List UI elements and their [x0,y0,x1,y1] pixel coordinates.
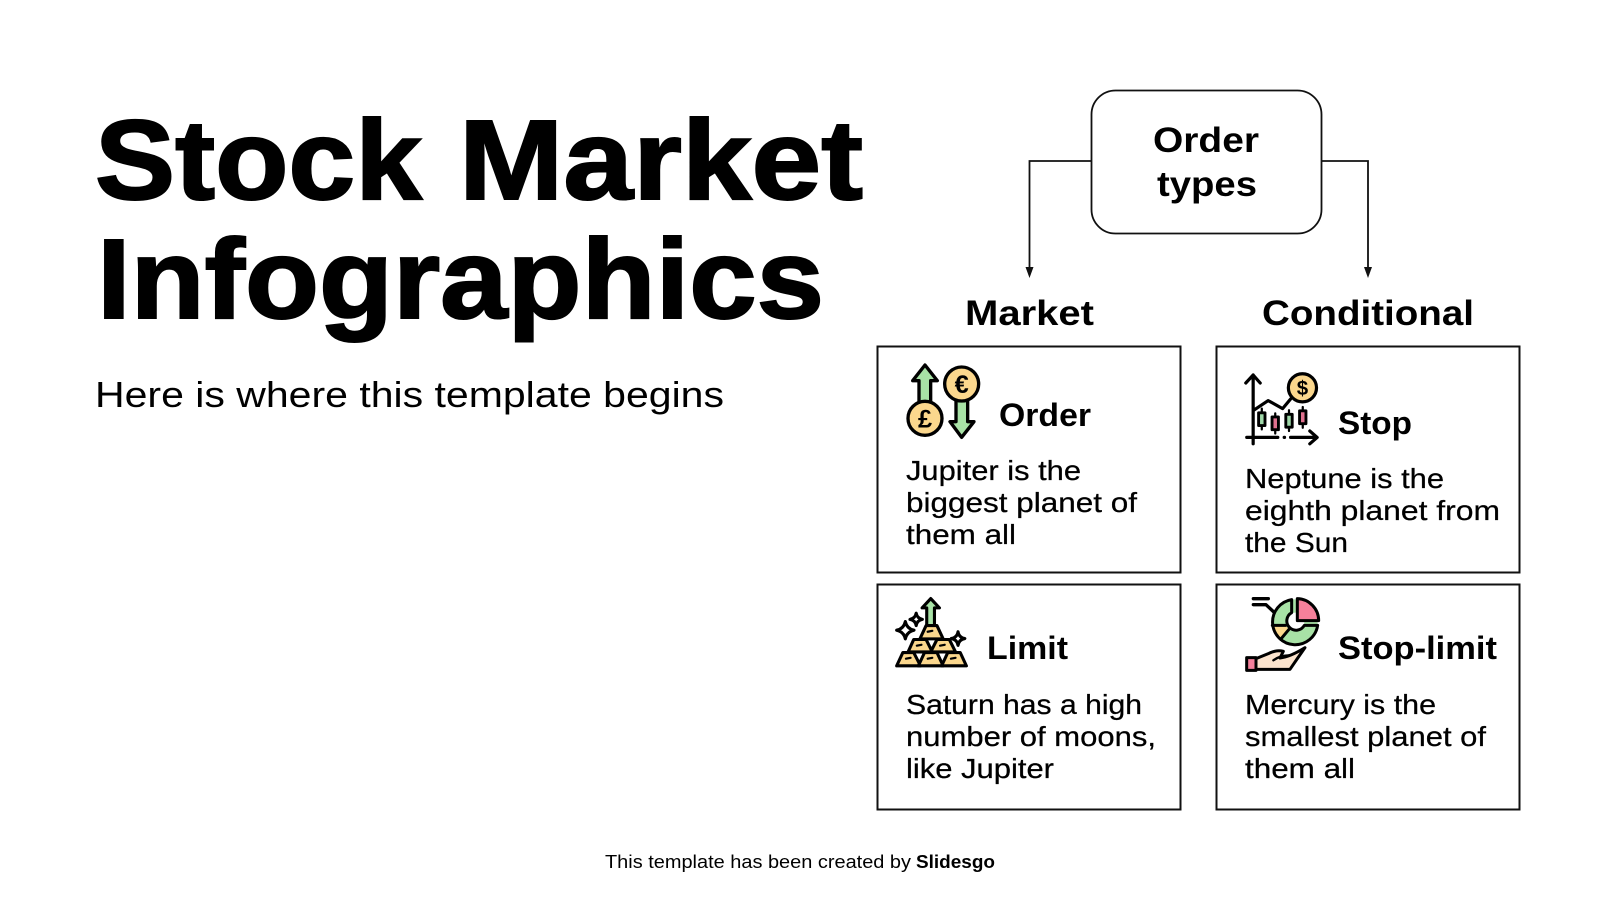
card text: number of moons, [906,721,1156,752]
icon: candlestick chart with coin [1246,374,1317,444]
root box: order types: Order [1153,121,1259,160]
title: Market [459,97,863,223]
card text: Jupiter is the [906,455,1081,486]
subtitle: Here is where this template begins [95,374,724,415]
title: Stock [95,97,422,223]
icon: currency exchange arrows: £ [918,406,932,434]
arrow: to conditional [1322,161,1372,278]
heading: market: Market [965,294,1094,333]
card text: like Jupiter [906,753,1054,784]
card text: smallest planet of [1245,721,1486,752]
icon: gold bars [897,599,966,666]
card text [906,455,1137,550]
title: Infographics [97,216,824,342]
root box: order types [1092,90,1322,234]
panel: order [878,346,1180,572]
arrow: to market [1026,161,1092,278]
card text: Saturn has a high [906,689,1142,720]
card text: eighth planet from [1245,495,1500,526]
card text: the Sun [1245,527,1348,558]
panel: limit [878,584,1180,810]
title [95,97,863,342]
card title: Stop-limit [1338,630,1497,666]
card text: biggest planet of [906,487,1137,518]
heading: conditional: Conditional [1262,294,1474,333]
card text [1245,689,1486,784]
icon: candlestick chart with coin: $ [1297,377,1309,400]
card text [1245,463,1500,558]
card text: Mercury is the [1245,689,1436,720]
icon: currency exchange arrows [908,365,979,437]
panel: stop [1216,346,1520,572]
panel: stop-limit [1216,584,1520,810]
card title: Stop [1338,405,1412,441]
root box: order types: types [1157,165,1257,204]
footer credit: Slidesgo [916,852,995,872]
card text: Neptune is the [1245,463,1444,494]
icon: hand with donut chart [1247,599,1319,670]
card text: them all [1245,753,1355,784]
card text: them all [906,519,1016,550]
card title: Order [999,397,1091,433]
footer credit: This template has been created by [605,852,911,872]
card text [906,689,1156,784]
card title: Limit [987,630,1068,666]
icon: currency exchange arrows: € [955,371,969,399]
